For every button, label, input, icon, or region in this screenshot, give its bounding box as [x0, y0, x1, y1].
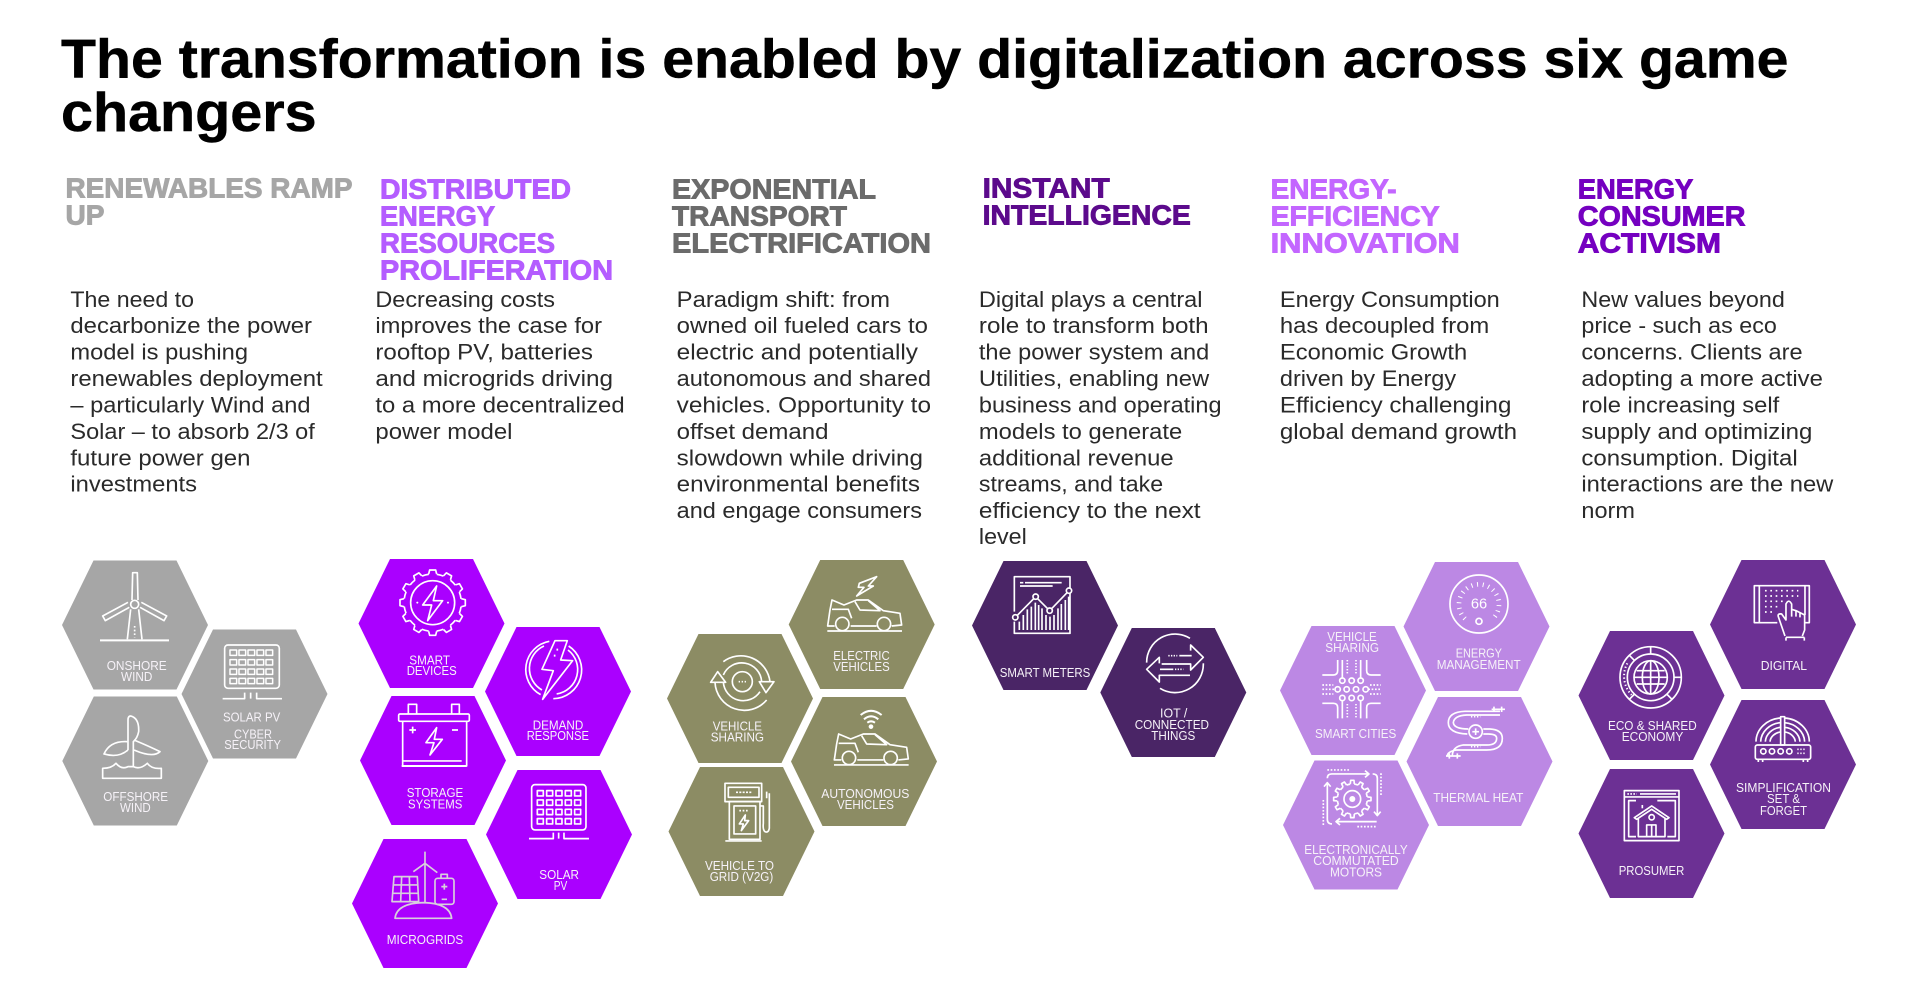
hexagon: iot connected things: CONNECTED [1135, 718, 1209, 732]
text block: activism description: New values beyond [1581, 287, 1785, 312]
hexagon: electronically commutated motors: COMMUTATED [1313, 854, 1399, 868]
hexagon: solar pv: SOLAR [539, 868, 579, 882]
hexagon: microgrids [352, 839, 498, 968]
hexagon: onshore wind [62, 560, 208, 690]
text block: activism description: role increasing self [1581, 392, 1780, 418]
hexagon: simplification set and forget: SET & [1767, 792, 1801, 806]
hexagon: autonomous vehicles: VEHICLES [837, 798, 894, 812]
hexagon: offshore wind: OFFSHORE [103, 790, 168, 804]
heading: energy-efficiency innovation: INNOVATION [1271, 228, 1460, 258]
text block: distributed energy description: power model [375, 419, 512, 444]
hexagon: vehicle to grid: GRID (V2G) [710, 870, 773, 884]
icon: thermostat: 66 [1471, 597, 1487, 613]
text block: activism description: adopting a more active [1581, 366, 1823, 391]
hexagon: thermal heat [1406, 697, 1552, 826]
heading: renewables ramp up [66, 172, 352, 230]
heading: exponential transport electrification [672, 174, 931, 258]
heading: distributed energy resources proliferation: ENERGY [380, 201, 495, 232]
icon: exchange arrows [1147, 634, 1203, 693]
text block: activism description: supply and optimizing [1581, 419, 1812, 444]
text block: intelligence description [979, 287, 1222, 549]
hexagon: digital: DIGITAL [1761, 659, 1807, 673]
hexagon: electric vehicles [789, 560, 935, 689]
hexagon: solar pv and cyber security: SECURITY [224, 738, 282, 752]
hexagon: solar pv and cyber security: CYBER [234, 727, 272, 741]
hexagon: electronically commutated motors: ELECTRONICALLY [1304, 843, 1408, 857]
panel: instant intelligence [972, 172, 1246, 757]
hexagon: demand response: RESPONSE [527, 729, 589, 743]
hexagon: energy management [1404, 562, 1550, 691]
text block: transport description [677, 287, 931, 523]
hexagon: energy management: MANAGEMENT [1437, 658, 1521, 672]
icon: gear with bolt [400, 570, 465, 635]
hexagon: vehicle sharing [667, 634, 813, 763]
hexagon: digital [1710, 560, 1856, 689]
icon: heat pipes [1446, 707, 1505, 759]
title [61, 28, 1788, 143]
text block: activism description: price - such as eco [1581, 313, 1777, 338]
hexagon: offshore wind: WIND [120, 801, 151, 815]
hexagon: smart devices: DEVICES [407, 664, 457, 678]
text block: renewables description: renewables deployment [70, 366, 323, 391]
hexagon: electric vehicles: ELECTRIC [833, 649, 890, 663]
heading: renewables ramp up: UP [66, 200, 104, 230]
text block: renewables description: future power gen [70, 446, 251, 470]
hexagon: prosumer [1578, 769, 1724, 898]
hexagon: eco and shared economy [1578, 631, 1724, 760]
heading: exponential transport electrification: ELECTRIFICATION [672, 228, 931, 258]
text block: efficiency description: Energy Consumption [1280, 287, 1500, 312]
text block: renewables description [70, 287, 323, 496]
hexagon: eco and shared economy: ECONOMY [1622, 730, 1684, 744]
icon: sharing arrows [711, 656, 774, 710]
hexagon: smart cities: SHARING [1325, 641, 1379, 655]
hexagon: iot connected things: THINGS [1151, 729, 1195, 743]
text block: activism description: concerns. Clients are [1581, 340, 1803, 364]
hexagon: prosumer: PROSUMER [1619, 864, 1684, 878]
text block: activism description: norm [1581, 498, 1635, 523]
hexagon: solar pv and cyber security: SOLAR PV [223, 711, 281, 725]
heading: energy-efficiency innovation [1271, 174, 1460, 258]
text block: distributed energy description: rooftop PV, batteries [375, 340, 593, 364]
hexagon: iot connected things [1100, 628, 1246, 757]
text block: efficiency description: driven by Energy [1280, 366, 1457, 391]
text block: transport description: Paradigm shift: from [677, 287, 890, 312]
hexagon: thermal heat: THERMAL HEAT [1433, 791, 1524, 805]
heading: energy consumer activism [1578, 174, 1746, 258]
text block: distributed energy description: improves the case for [375, 313, 603, 338]
icon: touch screen [1754, 586, 1809, 641]
heading: energy-efficiency innovation: EFFICIENCY [1271, 201, 1440, 232]
icon: battery [399, 704, 469, 766]
hexagon: solar pv [486, 770, 632, 899]
text block: efficiency description [1280, 287, 1517, 444]
text block: activism description: interactions are the new [1581, 472, 1834, 496]
hexagon: smart cities: SMART CITIES [1315, 727, 1396, 741]
hexagon: onshore wind: WIND [121, 670, 152, 684]
hexagon: simplification set and forget [1710, 700, 1856, 829]
text block: efficiency description: Economic Growth [1280, 340, 1467, 364]
heading: instant intelligence [983, 172, 1191, 230]
hexagon: smart devices [358, 559, 504, 688]
text block: transport description: autonomous and shared [677, 366, 931, 391]
text block: renewables description: – particularly Wind and [70, 392, 311, 418]
hexagon: vehicle to grid: VEHICLE TO [705, 859, 774, 873]
icon: globe [1620, 647, 1681, 708]
text block: distributed energy description [375, 287, 625, 444]
hexagon: smart meters [972, 561, 1118, 690]
heading: instant intelligence: INSTANT [983, 172, 1110, 204]
icon: circuit city [1322, 660, 1381, 718]
heading: energy consumer activism: ENERGY [1578, 174, 1694, 204]
hexagon: storage systems [360, 696, 506, 825]
icon: connected car [834, 711, 909, 765]
hexagon: solar pv and cyber security [182, 630, 328, 758]
heading: energy consumer activism: ACTIVISM [1578, 228, 1721, 258]
hexagon: electronically commutated motors: MOTORS [1330, 866, 1382, 880]
text block: renewables description: investments [70, 472, 197, 496]
hexagon: microgrids: MICROGRIDS [387, 933, 463, 947]
icon: offshore turbine [103, 716, 161, 778]
text block: efficiency description: has decoupled from [1280, 313, 1489, 338]
icon: bolt in circle [526, 641, 582, 699]
hexagon: smart cities [1280, 626, 1426, 755]
icon: thermostat [1450, 575, 1508, 633]
hexagon: iot connected things: IOT / [1160, 707, 1188, 721]
panel: energy consumer activism [1578, 174, 1856, 898]
text block: transport description: environmental benefits [677, 472, 920, 496]
hexagon: vehicle to grid [668, 767, 814, 896]
icon: wind turbine [100, 573, 169, 640]
text block: renewables description: Solar – to absorb 2/3 of [70, 419, 316, 444]
text block: transport description: owned oil fueled cars to [677, 313, 928, 338]
text block: transport description: vehicles. Opportunity to [677, 392, 931, 418]
hexagon: smart cities: VEHICLE [1327, 630, 1377, 644]
text block: transport description: electric and potentially [677, 340, 919, 364]
text block: intelligence description: models to generate [979, 419, 1182, 444]
icon: motor gear [1323, 770, 1381, 827]
text block: intelligence description: role to transform both [979, 313, 1209, 338]
text block: activism description: consumption. Digital [1581, 446, 1798, 470]
hexagon: demand response [485, 627, 631, 756]
hexagon: simplification set and forget: FORGET [1760, 804, 1807, 818]
icon: microgrid [392, 852, 454, 918]
icon: chart window [1013, 577, 1072, 633]
panel: renewables ramp up [62, 172, 352, 826]
hexagon: smart meters: SMART METERS [1000, 666, 1090, 680]
text block: distributed energy description: to a more decentralized [375, 392, 625, 418]
text block: renewables description: model is pushing [70, 340, 248, 364]
icon: solar panel [223, 645, 282, 699]
heading: renewables ramp up: RENEWABLES RAMP [66, 172, 352, 204]
text block: distributed energy description: and microgrids driving [375, 366, 613, 391]
text block: distributed energy description: Decreasing costs [375, 287, 555, 312]
title: changers [61, 81, 317, 143]
text block: intelligence description: streams, and take [979, 472, 1163, 496]
panel: exponential transport electrification [667, 174, 937, 896]
text block: efficiency description: global demand growth [1280, 419, 1517, 444]
heading: distributed energy resources proliferation: RESOURCES [380, 228, 555, 258]
text block: renewables description: The need to [70, 287, 194, 312]
text block: intelligence description: the power system and [979, 340, 1209, 364]
text block: intelligence description: additional revenue [979, 446, 1174, 470]
heading: distributed energy resources proliferation: PROLIFERATION [380, 255, 613, 286]
panel: distributed energy resources proliferation [352, 174, 632, 968]
hexagon: electric vehicles: VEHICLES [833, 660, 890, 674]
title: The transformation is enabled by digitalization across six game [61, 28, 1788, 90]
text block: intelligence description: Digital plays a central [979, 287, 1202, 312]
hexagon: smart devices: SMART [409, 653, 450, 667]
hexagon: autonomous vehicles [791, 697, 937, 826]
heading: instant intelligence: INTELLIGENCE [983, 200, 1191, 230]
hexagon: vehicle sharing: VEHICLE [713, 720, 762, 734]
hexagon: onshore wind: ONSHORE [107, 659, 167, 673]
hexagon: storage systems: SYSTEMS [408, 797, 462, 811]
text block: transport description: slowdown while driving [677, 446, 923, 470]
heading: distributed energy resources proliferation [380, 174, 613, 286]
heading: energy consumer activism: CONSUMER [1578, 201, 1746, 232]
text block: intelligence description: Utilities, enabling new [979, 366, 1210, 391]
heading: exponential transport electrification: EXPONENTIAL [672, 174, 876, 204]
text block: intelligence description: business and operating [979, 392, 1222, 418]
heading: distributed energy resources proliferation: DISTRIBUTED [380, 174, 571, 204]
hexagon: vehicle sharing: SHARING [711, 731, 764, 745]
hexagon: autonomous vehicles: AUTONOMOUS [821, 787, 909, 801]
hexagon: solar pv: PV [554, 879, 568, 893]
hexagon: electronically commutated motors [1283, 760, 1429, 890]
icon: electric car [827, 577, 902, 631]
hexagon: energy management: ENERGY [1456, 647, 1503, 661]
hexagon: storage systems: STORAGE [407, 786, 463, 800]
hexagon: offshore wind [62, 696, 208, 826]
text block: transport description: and engage consumers [677, 498, 922, 523]
text block: intelligence description: efficiency to the next [979, 498, 1201, 523]
text block: intelligence description: level [979, 524, 1027, 549]
heading: exponential transport electrification: TRANSPORT [672, 201, 847, 232]
icon: solar panel [529, 785, 589, 839]
heading: energy-efficiency innovation: ENERGY- [1271, 174, 1397, 204]
hexagon: simplification set and forget: SIMPLIFICATION [1736, 781, 1831, 795]
text block: renewables description: decarbonize the power [70, 313, 313, 338]
hexagon: demand response: DEMAND [533, 718, 583, 732]
hexagon: eco and shared economy: ECO & SHARED [1608, 719, 1697, 733]
icon: home in browser window [1624, 791, 1679, 841]
text block: transport description: offset demand [677, 419, 828, 444]
icon: charging pump [725, 783, 769, 841]
icon: router [1755, 717, 1811, 762]
text block: activism description [1581, 287, 1834, 523]
panel: energy-efficiency innovation [1271, 174, 1552, 890]
text block: efficiency description: Efficiency challenging [1280, 392, 1511, 418]
